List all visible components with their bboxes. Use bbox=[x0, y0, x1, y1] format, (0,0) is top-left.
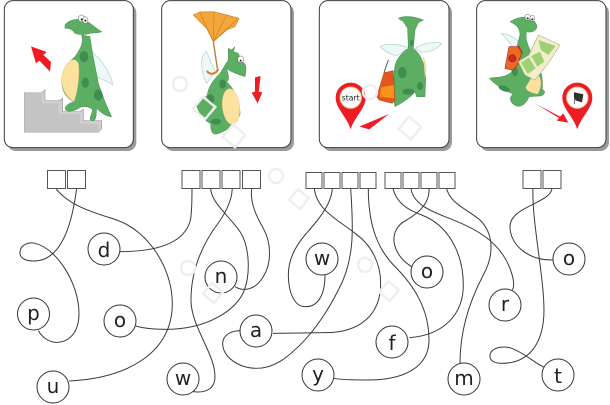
icon: backpack bbox=[505, 46, 522, 70]
connecting lines: right half bbox=[223, 189, 553, 380]
answer boxes: to bbox=[523, 170, 561, 188]
letter circle: y: y bbox=[312, 362, 324, 386]
letter circle: n bbox=[205, 261, 237, 293]
letter circle: m: m bbox=[454, 366, 474, 390]
icon: green dragon walking upstairs bbox=[62, 15, 113, 121]
icon: broken orange umbrella bbox=[193, 12, 239, 68]
letter circle: u: u bbox=[47, 374, 59, 398]
letter circle: o: o bbox=[421, 259, 433, 283]
icon: finish map pin bbox=[562, 83, 592, 129]
letter circle: w: w bbox=[175, 366, 191, 390]
letter circle: w bbox=[306, 243, 338, 275]
icon: red arrow to suitcase bbox=[359, 114, 389, 129]
letter circle: r bbox=[489, 289, 521, 321]
panel: dragon with map heading to finish bbox=[477, 1, 609, 151]
answer boxes: down bbox=[182, 170, 260, 188]
answer boxes: from bbox=[385, 172, 455, 188]
answer boxes: away bbox=[306, 172, 376, 188]
icon: map bbox=[518, 35, 560, 80]
connecting lines: left half bbox=[20, 189, 270, 392]
letter circle: o: o bbox=[563, 246, 575, 270]
letter circle: w: w bbox=[314, 246, 330, 270]
letter circle: p: p bbox=[27, 301, 40, 325]
answer boxes: up bbox=[48, 170, 86, 188]
icon: stairs bbox=[24, 90, 102, 132]
watermark bbox=[173, 77, 421, 303]
letter circle: t: t bbox=[554, 364, 562, 388]
letter circle: f: f bbox=[388, 331, 396, 355]
letter circle: o bbox=[411, 256, 443, 288]
letter circle: d bbox=[88, 233, 120, 265]
letter circle: p bbox=[18, 298, 50, 330]
panel: dragon climbing stairs bbox=[4, 1, 136, 151]
icon: orange suitcase bbox=[377, 60, 395, 103]
letter circle: y bbox=[302, 359, 334, 391]
letter circle: o bbox=[104, 305, 136, 337]
icon: red arrow to finish bbox=[535, 103, 568, 123]
panel: dragon falling with umbrella bbox=[162, 1, 294, 151]
letter circle: o bbox=[553, 243, 585, 275]
letter circle: d: d bbox=[98, 238, 110, 262]
letter circle: f bbox=[376, 326, 408, 358]
letter circle: n: n bbox=[215, 264, 227, 288]
letter circle: w bbox=[167, 363, 199, 395]
letter circle: t bbox=[542, 359, 574, 391]
icon: green dragon with map and backpack bbox=[489, 14, 560, 106]
letter circle: m bbox=[448, 363, 480, 395]
letter circle: a bbox=[240, 315, 272, 347]
icon: red arrow up-left bbox=[31, 46, 51, 72]
letter circle: o: o bbox=[114, 308, 126, 332]
letter circle: u bbox=[37, 371, 69, 403]
panel: dragon with suitcase at start bbox=[319, 1, 452, 151]
icon: start map pin: start bbox=[342, 93, 360, 102]
letter circle: r: r bbox=[501, 292, 510, 316]
letter circle: a: a bbox=[250, 318, 262, 342]
icon: red arrow down bbox=[252, 76, 262, 103]
icon: green dragon falling bbox=[197, 47, 246, 134]
icon: green dragon from behind with wings bbox=[380, 17, 442, 107]
icon: start map pin bbox=[336, 83, 366, 129]
